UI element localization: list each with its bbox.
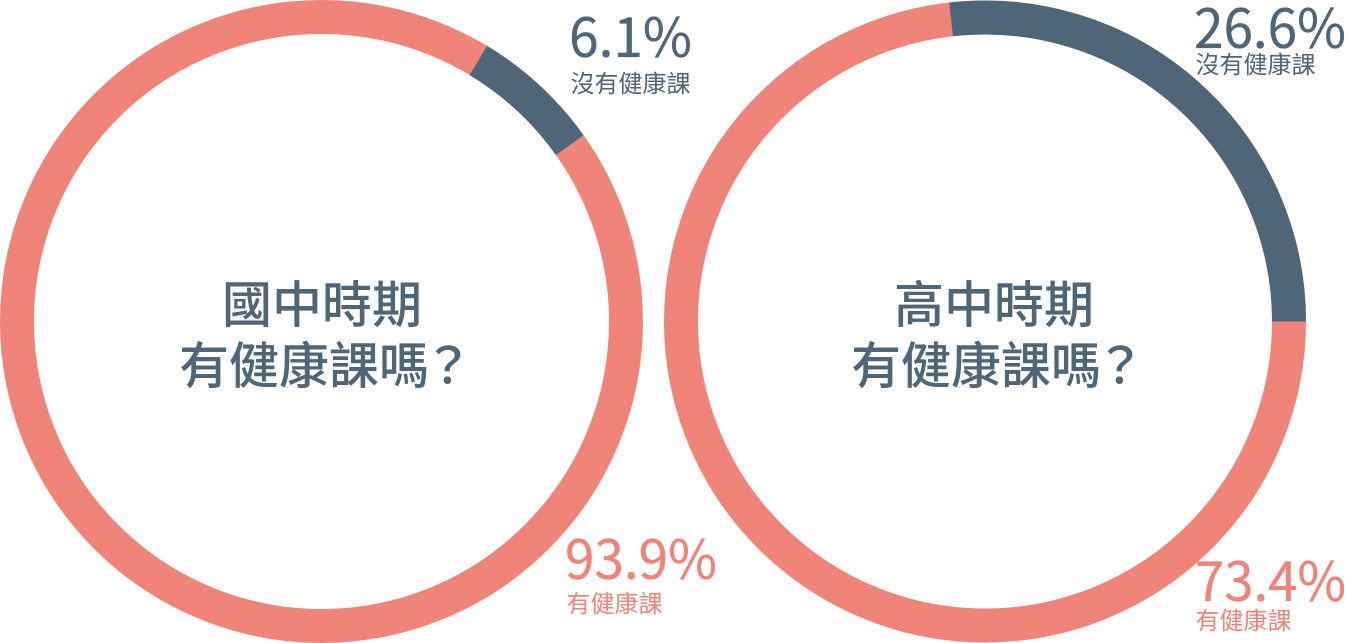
donut ring: has health class 73.4%	[681, 18, 1289, 626]
heading: junior high: 有健康課嗎	[179, 338, 429, 394]
heading: senior high	[851, 278, 1145, 394]
panel: senior high donut	[681, 0, 1346, 636]
heading: senior high: 有健康課嗎	[851, 338, 1101, 394]
donut segment: no health class 26.6%	[951, 18, 1289, 321]
donut segment: no health class 6.1%	[478, 60, 570, 145]
label: 73.4% has health class: 有健康課	[1196, 601, 1292, 636]
panel: junior high donut	[17, 0, 717, 626]
label: 26.6% no health class: 沒有健康課	[1196, 45, 1316, 80]
donut ring: has health class 93.9%	[17, 17, 626, 626]
heading: senior high: ？	[1095, 338, 1145, 394]
heading: junior high	[179, 278, 473, 394]
heading: junior high: ？	[423, 338, 473, 394]
label: 93.9% has health class: 93.9%	[565, 516, 717, 595]
heading: junior high: 國中時期	[222, 278, 422, 334]
heading: senior high: 高中時期	[894, 278, 1094, 334]
label: 6.1% no health class: 沒有健康課	[570, 64, 690, 99]
label: 73.4% has health class: 73.4%	[1195, 538, 1346, 617]
label: 93.9% has health class: 有健康課	[566, 584, 662, 619]
